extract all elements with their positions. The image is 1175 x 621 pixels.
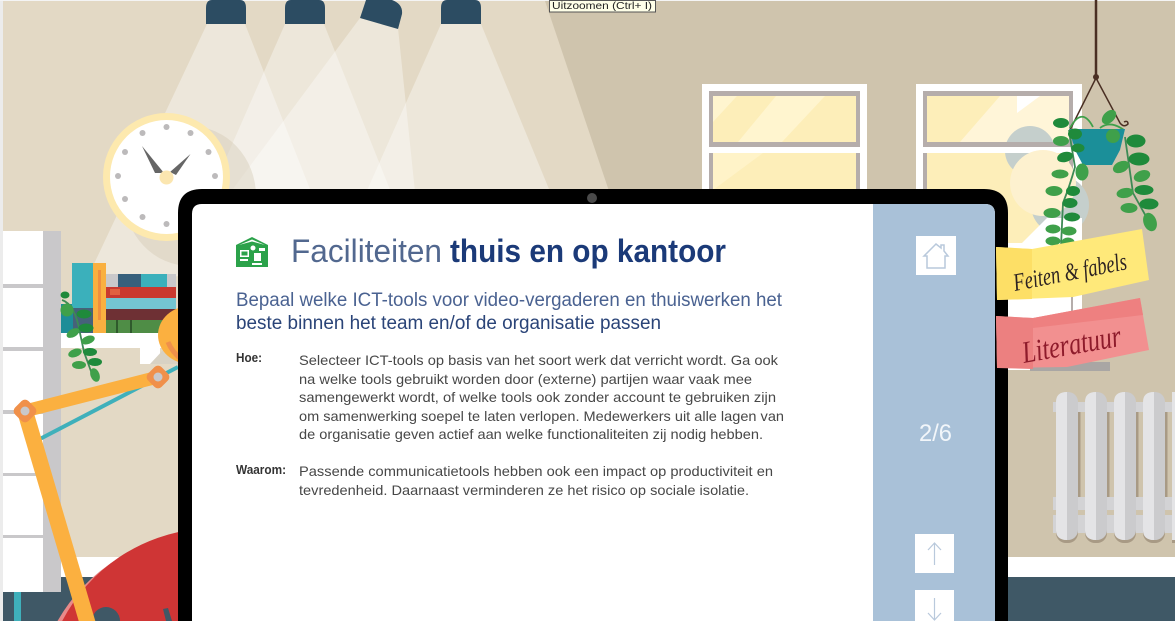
sticky note: literatuur: Literatuur [1018, 318, 1124, 370]
icon: home button [916, 236, 956, 275]
text block: waarom: tevredenheid. Daarnaast verminderen ze het risico op sociale isolatie. [299, 482, 749, 498]
red chair [58, 529, 200, 621]
arrow up button [915, 534, 954, 573]
window left of wall with panes [3, 231, 61, 592]
sticky note: literatuur [996, 298, 1149, 370]
ceiling light beams [77, 18, 570, 300]
subtitle [236, 290, 783, 334]
text block: hoe: na welke tools gebruikt worden door (externe) partijen waar vaak mee [299, 371, 752, 387]
title [291, 233, 726, 269]
shelf plant [60, 292, 102, 383]
desk lamp [12, 306, 222, 621]
title: thuis en op kantoor [450, 233, 726, 269]
arrow down button [915, 590, 954, 621]
subtitle: beste binnen het team en/of de organisatie passen [236, 313, 661, 334]
text block: waarom: Passende communicatietools hebben ook een impact op productiviteit en [299, 463, 773, 479]
radiator [1053, 392, 1175, 543]
text block: hoe: samengewerkt wordt, of welke tools ook zonder account te gebruiken zijn [299, 389, 776, 405]
text block: waarom [236, 463, 773, 498]
subtitle: Bepaal welke ICT-tools voor video-vergaderen en thuiswerken het [236, 290, 783, 311]
text block: hoe: Selecteer ICT-tools op basis van het soort werk dat verricht wordt. Ga ook [299, 352, 779, 368]
ceiling lamps [206, 0, 481, 29]
office window centre [702, 84, 867, 194]
text block: hoe: Hoe: [236, 351, 262, 365]
floor and skirting board [3, 557, 1175, 621]
webcam [587, 193, 597, 203]
bookshelf with books [61, 263, 181, 364]
sticky note: feiten en fabels [996, 229, 1149, 300]
browser tooltip: Uitzoomen (Ctrl+ I) [552, 0, 652, 12]
wall clock [103, 113, 256, 266]
laptop frame [178, 189, 1008, 621]
text block: hoe: om samenwerking soepel te laten verlopen. Medewerkers uit alle lagen van [299, 408, 784, 424]
text block: hoe: de organisatie geven actief aan welke functionaliteiten zij nodig hebben. [299, 426, 763, 442]
icon: green office house [236, 237, 268, 267]
text block: waarom: Waarom: [236, 463, 286, 477]
office window right [916, 84, 1110, 371]
title: Faciliteiten [291, 233, 442, 269]
sticky note: feiten en fabels: Feiten & fabels [1010, 248, 1129, 297]
page counter: 2/6 [919, 420, 952, 447]
text block: hoe [236, 351, 784, 442]
hanging plant [1044, 0, 1159, 246]
